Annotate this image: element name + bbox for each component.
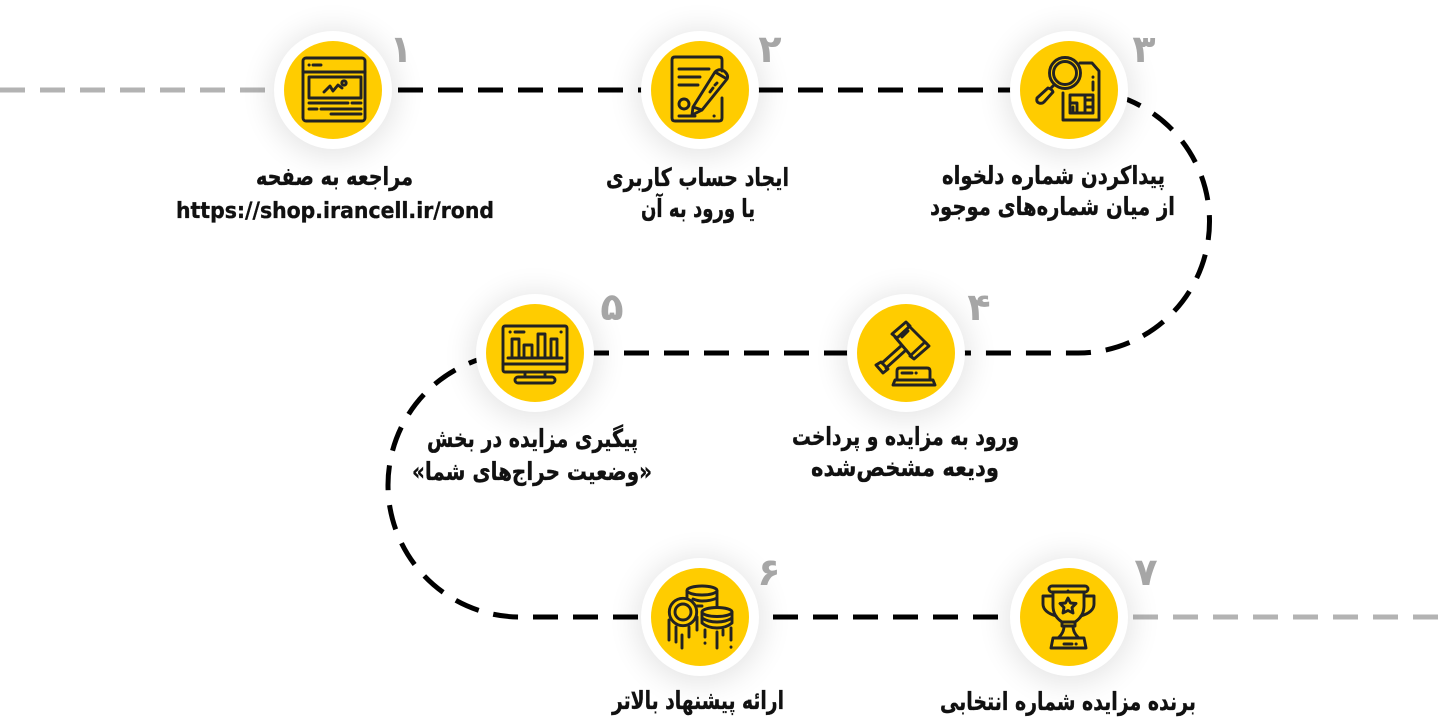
step 6 label: ارائه پیشنهاد بالاتر: [611, 686, 784, 716]
step 7 label: برنده مزایده شماره انتخابی: [940, 687, 1196, 717]
step 1: [176, 27, 494, 224]
step 4 label: ودیعه مشخص‌شده: [811, 453, 999, 483]
number 3: ۳: [1132, 27, 1156, 71]
icon: form and pencil: [672, 57, 728, 121]
number 4: ۴: [967, 285, 991, 329]
step 1 node: [269, 29, 397, 157]
step 6: [611, 550, 784, 716]
step 7 node: [1005, 556, 1133, 684]
icon: web page: [303, 58, 365, 121]
step 1 label: [176, 162, 494, 224]
number 2: ۲: [758, 27, 782, 71]
icon: monitor with bar chart: [503, 326, 567, 383]
step 4 label: [792, 422, 1019, 483]
icon: trophy: [1043, 586, 1094, 648]
step 2 label: [606, 163, 789, 224]
dashed path: left curve and bottom row: [388, 353, 998, 617]
step 6 node: [636, 556, 764, 684]
step 3 node: [1005, 29, 1133, 157]
step 4 label: ورود به مزایده و پرداخت: [792, 422, 1019, 452]
step 2 label: یا ورود به آن: [641, 193, 755, 224]
step 3 label: [930, 161, 1175, 222]
step 4: [792, 285, 1019, 483]
dashed path: top row and right curve: [398, 90, 1210, 353]
step 1 label: https://shop.irancell.ir/rond: [176, 199, 494, 224]
step 1 label: مراجعه به صفحه: [256, 162, 413, 192]
icon: coins: [669, 586, 732, 648]
step 5 label: [412, 424, 652, 487]
icon: magnifier and SIM card: [1037, 58, 1099, 120]
step 7: [940, 550, 1196, 717]
number 6: ۶: [757, 550, 781, 594]
step 2 label: ایجاد حساب کاربری: [606, 163, 789, 193]
number 1: ۱: [389, 27, 413, 71]
gray dashed line: start: [0, 88, 265, 92]
step 3 label: از میان شماره‌های موجود: [930, 192, 1175, 222]
dashed path: middle row: [590, 350, 849, 356]
step 5 node: [471, 292, 599, 420]
icon: gavel: [876, 322, 935, 385]
step 5: [412, 285, 652, 487]
step 2: [606, 27, 789, 224]
gray dashed line: end: [1133, 614, 1438, 620]
step 5 label: «وضعیت حراج‌های شما»: [412, 457, 652, 487]
step 2 node: [636, 29, 764, 157]
number 7: ۷: [1134, 550, 1158, 594]
step 3: [930, 27, 1175, 222]
step 3 label: پیداکردن شماره دلخواه: [942, 161, 1165, 191]
step 4 node: [842, 292, 970, 420]
number 5: ۵: [600, 285, 624, 329]
step 5 label: پیگیری مزایده در بخش: [427, 424, 638, 454]
